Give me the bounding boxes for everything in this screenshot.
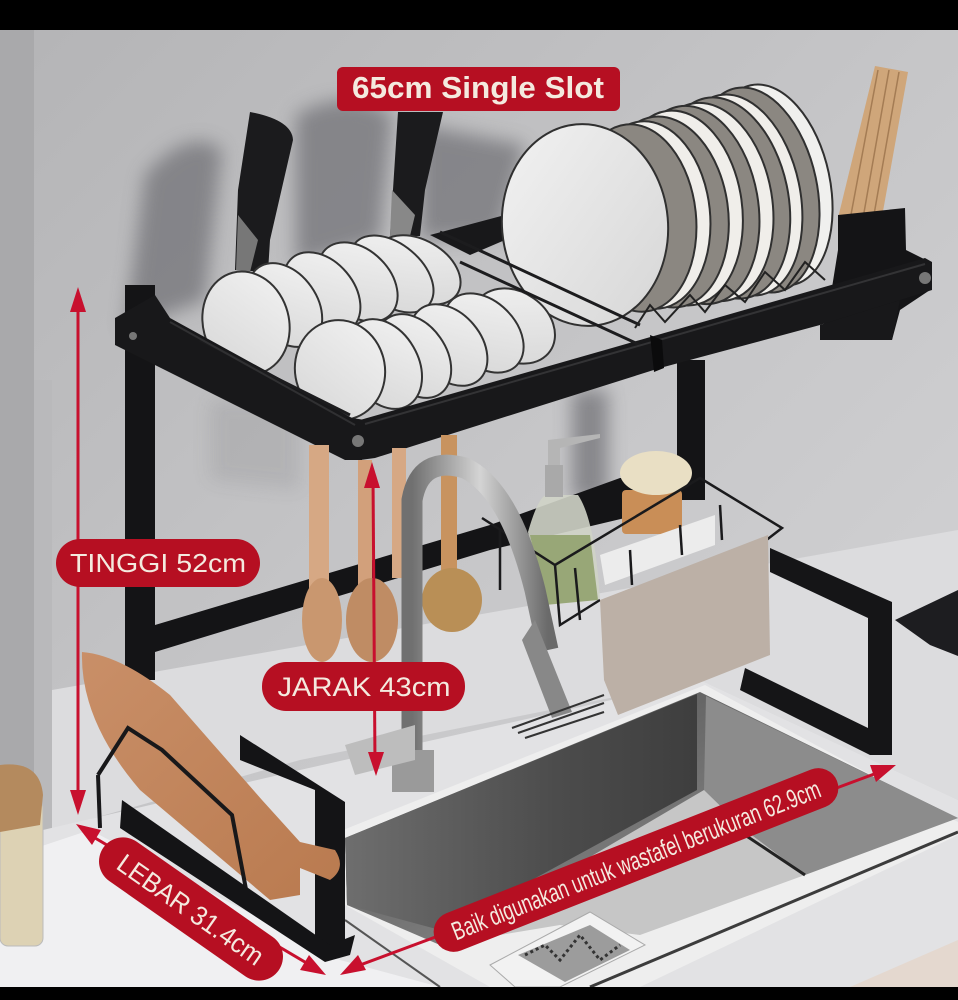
glass jar (0, 764, 43, 946)
wall shadows (125, 100, 608, 500)
label: depth: LEBAR 31.4cm (111, 848, 269, 971)
board rack base (120, 800, 355, 962)
chopsticks and holder (820, 66, 930, 340)
label: clearance (262, 662, 465, 711)
arrow: sink width (340, 765, 896, 975)
sink drain (490, 912, 645, 987)
hanging utensils (302, 435, 482, 662)
label: height: TINGGI 52cm (70, 548, 246, 578)
bowls upper shelf (191, 220, 570, 427)
upper shelf frame (115, 232, 932, 460)
label: depth (90, 828, 292, 990)
bottom black bar (0, 987, 958, 1000)
dish towel (600, 535, 770, 715)
lower right rack frame (740, 548, 892, 755)
label: 65cm Single Slot: 65cm Single Slot (352, 70, 604, 105)
back bar of upper shelf (430, 215, 505, 255)
board rack upright (240, 735, 345, 945)
arrow: clearance (364, 462, 384, 776)
label: sink size (428, 762, 844, 958)
plates upper right (494, 73, 850, 333)
arrow: depth (76, 824, 326, 975)
rack legs and lower shelf (125, 285, 705, 680)
label: clearance: JARAK 43cm (278, 672, 450, 702)
arrow: height (70, 287, 86, 815)
soap dispenser and brush (528, 434, 715, 605)
label: 65cm Single Slot (337, 67, 620, 111)
knives (235, 112, 443, 272)
cutting board (82, 652, 340, 900)
faucet (345, 465, 604, 792)
label: height (56, 539, 260, 587)
wire basket (482, 478, 782, 625)
sink basin (343, 685, 958, 987)
